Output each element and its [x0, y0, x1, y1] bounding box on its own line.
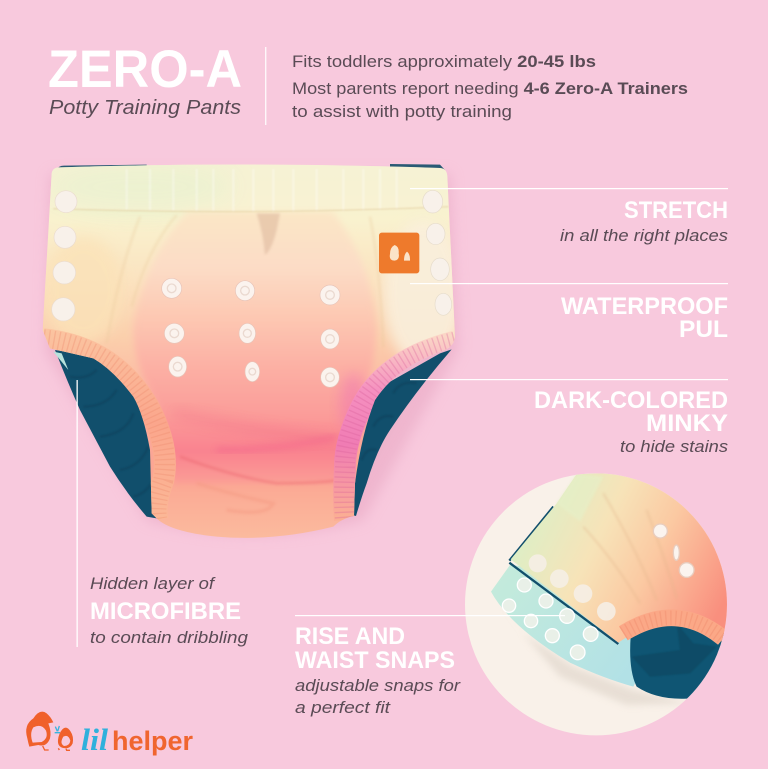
lower pants shadow [532, 642, 676, 706]
waistband [59, 165, 445, 192]
front pouch [133, 212, 377, 483]
callout: rise and waist snaps: a perfect fit [295, 699, 392, 717]
navy interior [630, 626, 724, 699]
callout: waterproof PUL: WATERPROOF [561, 293, 728, 320]
callout: stretch [560, 197, 728, 245]
header divider [265, 47, 266, 125]
upper pants snaps [529, 554, 616, 621]
side panel gathers [122, 215, 382, 312]
left leg elastic [43, 339, 165, 520]
callout lines [76, 188, 728, 647]
snaps, left waist [52, 191, 77, 321]
rise snaps [653, 524, 694, 577]
main product photo: training pants [33, 160, 467, 543]
fit and quantity text: to assist with potty training [292, 102, 512, 121]
pale edge of back layer [53, 352, 68, 370]
fit and quantity text: Most parents report needing 4-6 Zero-A Trainers [292, 79, 688, 98]
quilted lining texture [70, 370, 417, 497]
logo: lil helper [26, 712, 193, 757]
callout: dark-colored minky: to hide stains [620, 438, 728, 456]
callout: rise and waist snaps: adjustable snaps for [295, 677, 462, 695]
callout: waterproof PUL [561, 293, 728, 343]
callout: hidden microfibre layer [90, 575, 249, 647]
leg elastic [623, 618, 723, 638]
fold highlights [178, 410, 314, 438]
callout: hidden microfibre layer: Hidden layer of [90, 575, 217, 593]
snap centres [167, 284, 334, 382]
wordmark: lil [81, 722, 108, 757]
callout: dark-colored minky: DARK-COLORED [534, 387, 728, 414]
lower pants snaps [502, 578, 598, 660]
callout: hidden microfibre layer: to contain dribbling [90, 629, 249, 647]
title: ZERO-A [48, 40, 242, 99]
fit and quantity text [292, 52, 688, 121]
upper pants fabric [511, 470, 737, 643]
right leg elastic [344, 342, 455, 520]
callout: stretch: STRETCH [624, 197, 728, 224]
snaps, right waist [423, 190, 452, 315]
lower teal pants [491, 565, 635, 686]
callout: waterproof PUL: PUL [679, 316, 728, 343]
cream circle [465, 473, 727, 735]
callout: hidden microfibre layer: MICROFIBRE [90, 598, 241, 625]
navy edge [509, 507, 618, 644]
waistband [560, 479, 573, 498]
orange brand tag [379, 233, 419, 273]
navy lining, right leg [343, 349, 452, 516]
callout: stretch: in all the right places [560, 227, 728, 245]
soft shadow [45, 173, 458, 535]
waistband gathers [127, 170, 397, 211]
callout: rise and waist snaps: WAIST SNAPS [295, 647, 455, 674]
navy inner lining, waist [57, 164, 445, 173]
title block [48, 40, 242, 119]
fabric body [33, 160, 467, 543]
callout: dark-colored minky [534, 387, 728, 456]
circular detail photo: snaps close-up [465, 470, 737, 735]
icon: parent and baby birds [26, 712, 73, 750]
snaps, front rise [162, 278, 340, 387]
callout: rise and waist snaps [295, 623, 462, 717]
fabric gathers [584, 494, 626, 562]
logo: lil helper: helper [112, 726, 193, 756]
navy lining, left leg [55, 350, 177, 518]
rise and waist snaps callout line [295, 615, 565, 616]
side colour washes [62, 165, 210, 213]
fit and quantity text: Fits toddlers approximately 20-45 lbs [292, 52, 596, 71]
pouch top shading [257, 213, 280, 255]
callout: dark-colored minky: MINKY [646, 410, 728, 437]
callout: rise and waist snaps: RISE AND [295, 623, 405, 650]
subtitle: Potty Training Pants [49, 97, 241, 119]
